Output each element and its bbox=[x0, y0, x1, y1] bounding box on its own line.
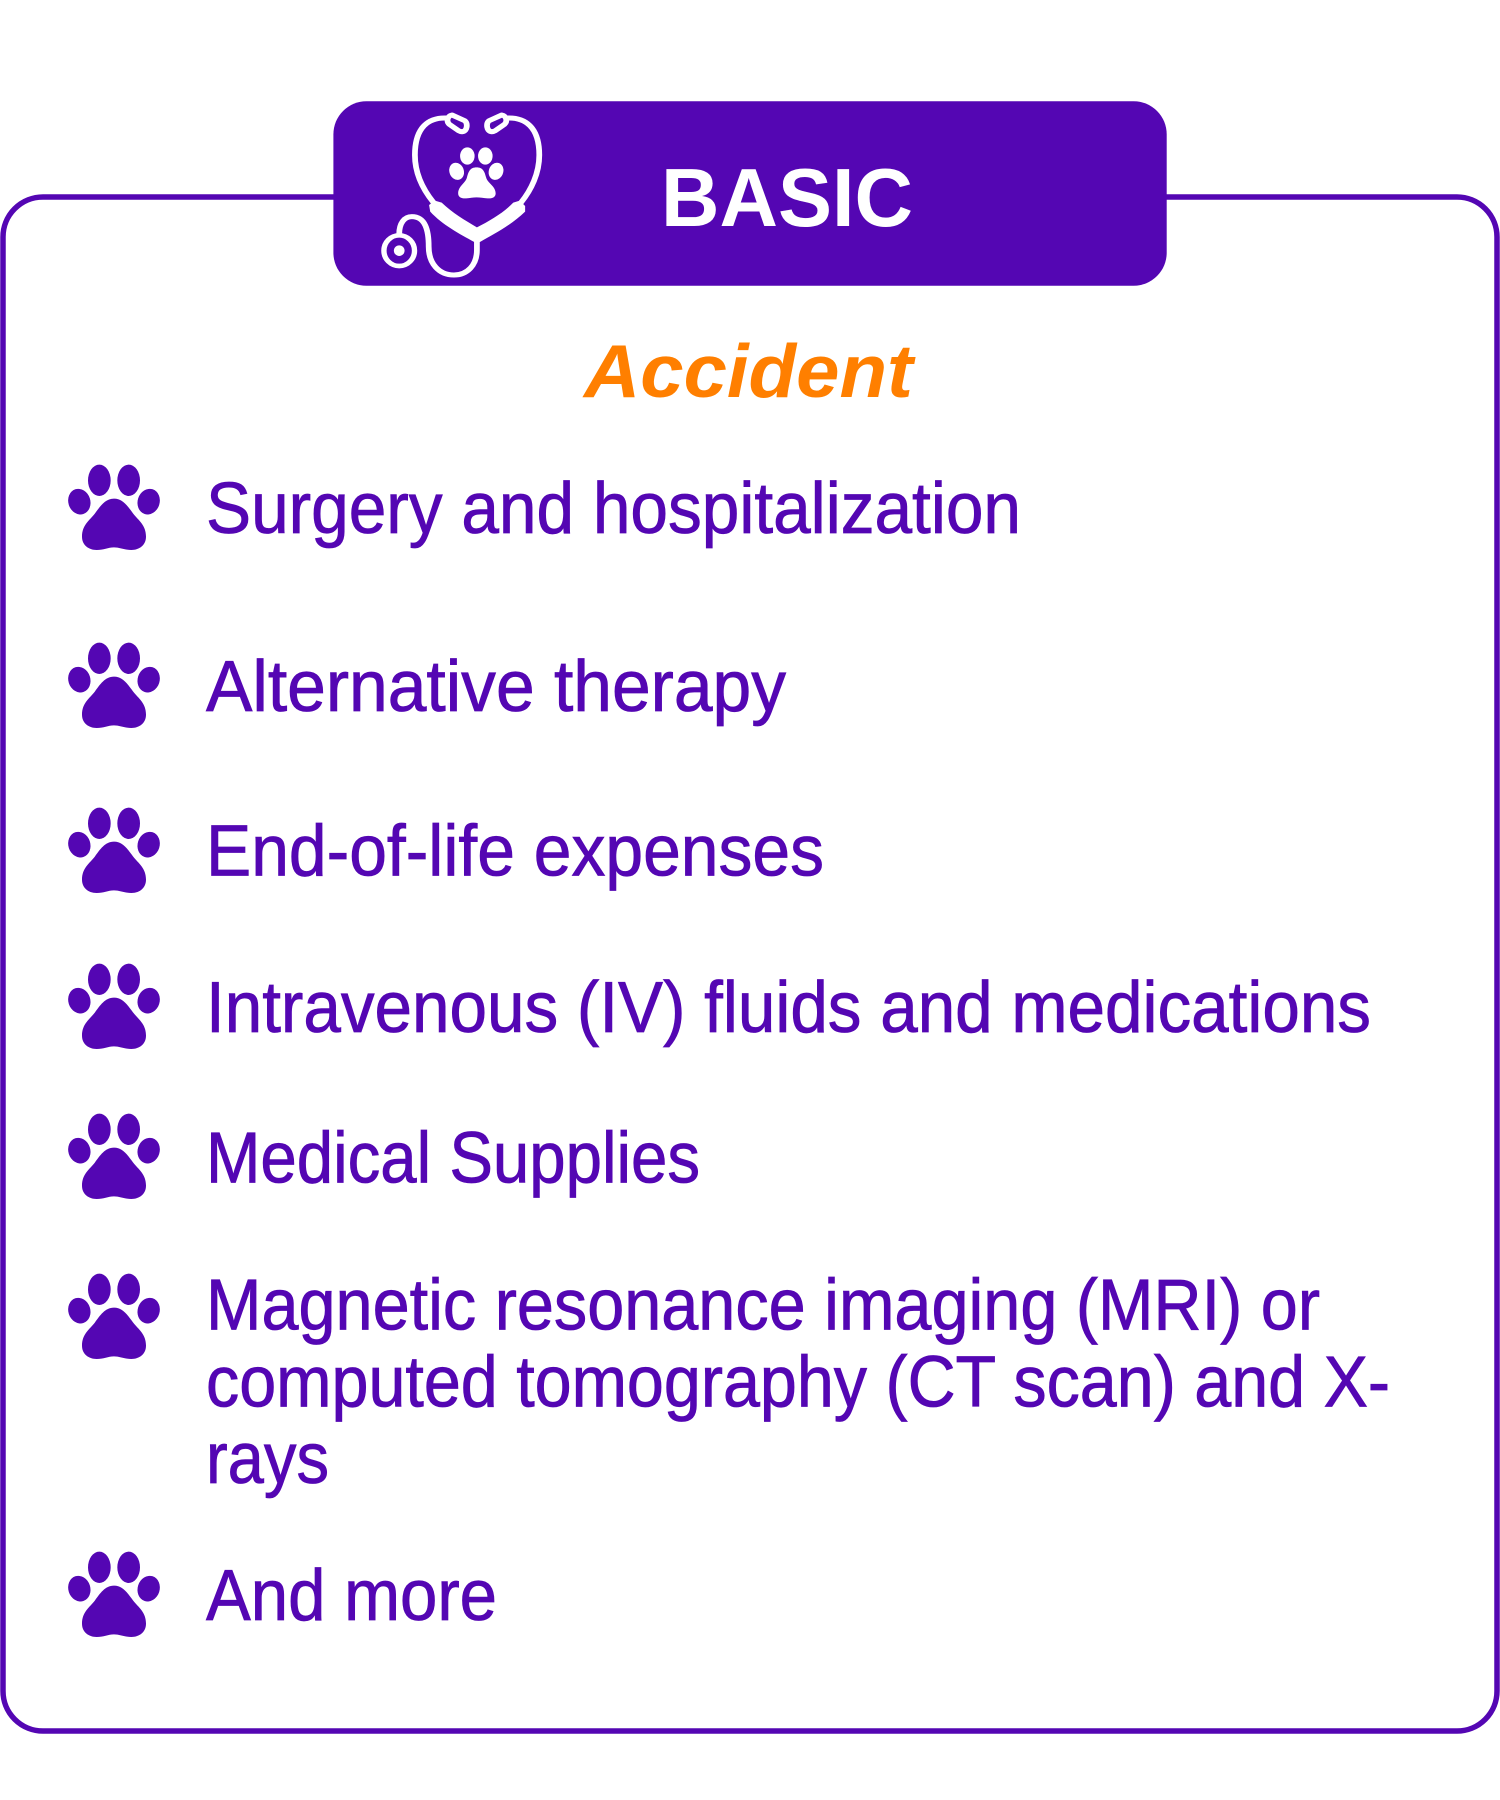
list item: medical supplies: Medical Supplies bbox=[206, 1118, 700, 1198]
icon: stethoscope with paw bbox=[384, 115, 539, 275]
list item: alternative therapy: Alternative therapy bbox=[206, 647, 786, 727]
list item: and more: And more bbox=[206, 1556, 497, 1636]
list item: MRI, CT and X-rays: computed tomography (CT scan) and X- bbox=[206, 1342, 1390, 1422]
list item: and more bbox=[65, 1552, 497, 1637]
banner background bbox=[333, 101, 1167, 286]
list item: MRI, CT and X-rays: Magnetic resonance imaging (MRI) or bbox=[206, 1266, 1320, 1346]
list item: medical supplies bbox=[65, 1114, 700, 1199]
list item: IV fluids: Intravenous (IV) fluids and medications bbox=[206, 968, 1371, 1048]
list item: surgery: Surgery and hospitalization bbox=[206, 469, 1021, 549]
list item: end-of-life: End-of-life expenses bbox=[206, 812, 824, 892]
subheading: Accident bbox=[582, 329, 916, 413]
list item: MRI, CT and X-rays bbox=[65, 1266, 1390, 1499]
list item: MRI, CT and X-rays: rays bbox=[206, 1419, 329, 1499]
header banner bbox=[333, 101, 1167, 286]
banner title: BASIC bbox=[661, 151, 913, 244]
